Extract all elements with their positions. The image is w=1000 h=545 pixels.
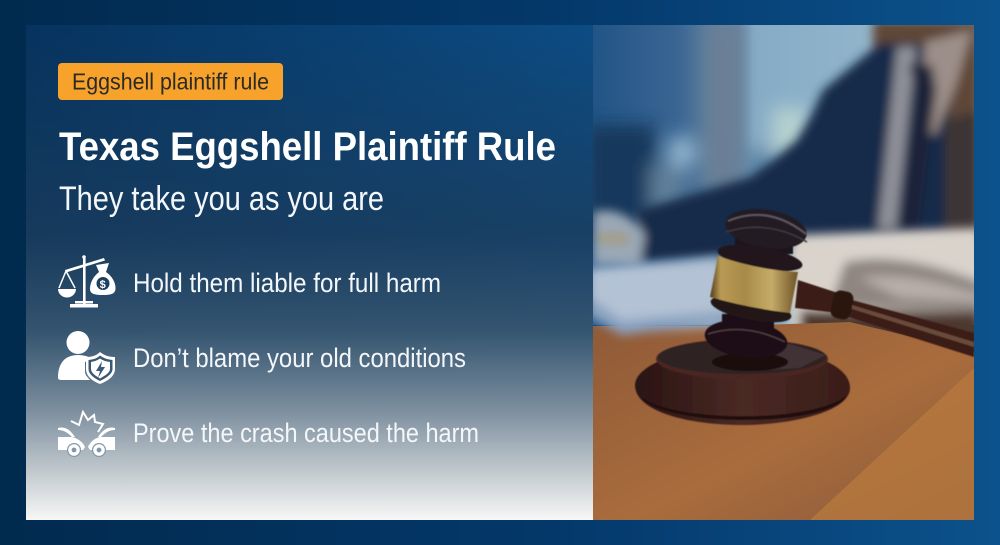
title: Texas Eggshell Plaintiff Rule <box>59 125 556 169</box>
handle <box>795 280 974 357</box>
text: hold them liable: Hold them liable for full harm <box>133 268 441 298</box>
panel: left text panel <box>26 25 593 520</box>
table <box>593 322 974 520</box>
background figure in suit <box>593 20 980 265</box>
text: prove the crash: Prove the crash caused the harm <box>133 418 479 448</box>
gold band <box>710 256 798 313</box>
photo: judge's gavel on desk <box>585 20 980 520</box>
sound block <box>634 362 850 426</box>
books <box>790 228 980 360</box>
head upper <box>735 238 793 254</box>
gavel <box>635 204 974 425</box>
icon: person with shield <box>58 331 115 384</box>
icon: scales and money bag: $ <box>100 279 106 291</box>
closed book on desk <box>588 258 735 335</box>
tag: Eggshell plaintiff rule: Eggshell plaintiff rule <box>72 68 269 94</box>
icon: scales and money bag <box>58 255 116 308</box>
tag: Eggshell plaintiff rule <box>58 63 283 100</box>
icon: car crash <box>58 412 115 457</box>
head lower <box>704 321 788 358</box>
text: don't blame: Don’t blame your old conditions <box>133 343 466 373</box>
subtitle: They take you as you are <box>59 180 384 218</box>
